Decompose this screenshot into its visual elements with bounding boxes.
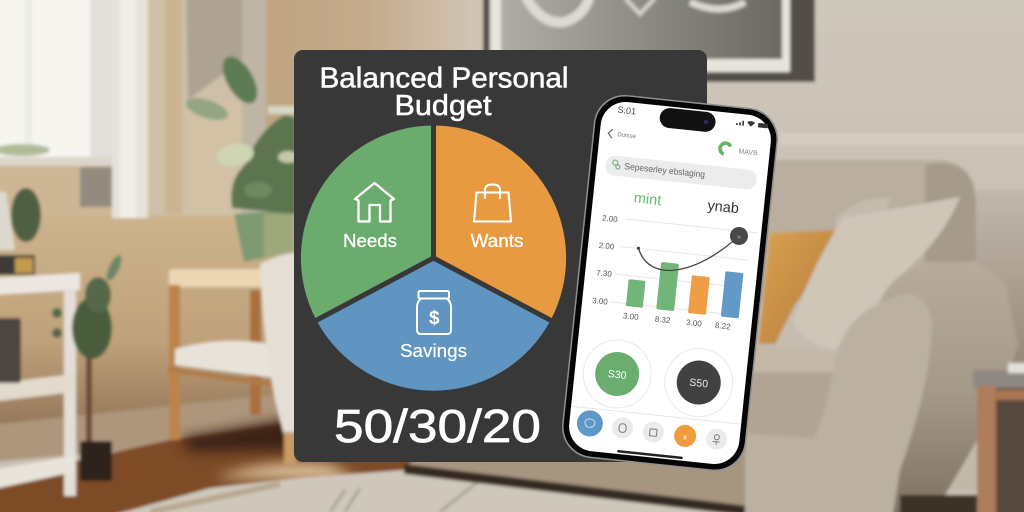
bar chart: 8.32: [654, 315, 671, 325]
phone mockup: [559, 92, 781, 474]
icon: savings jar: [417, 291, 451, 334]
baseboard: [0, 392, 300, 462]
icon: house: [355, 183, 394, 222]
plant: large leaves and pot: [183, 51, 298, 262]
icon: shopping bag: [474, 184, 511, 222]
bar chart: 3.00: [592, 296, 609, 307]
icon: savings jar: $: [429, 308, 440, 329]
small potted tree: [52, 253, 124, 481]
panel: 50/30/20 budget card: [294, 50, 707, 462]
white shelf: [0, 188, 80, 496]
sofa: [745, 160, 976, 512]
label: ynab: ynab: [707, 198, 740, 217]
app header: [607, 129, 759, 157]
title: Balanced Personal: [320, 62, 568, 94]
ratio text: 50/30/20: [334, 400, 541, 452]
beige cushion: [793, 197, 960, 350]
bar chart: 8.22: [715, 321, 732, 332]
curtains: [112, 0, 266, 218]
title: [320, 62, 568, 122]
bar chart: 3.00: [623, 311, 640, 322]
balance dial: dark: S50: [689, 377, 709, 391]
orange cushion: [758, 230, 835, 344]
bar chart: [591, 212, 758, 333]
search bar: Sepeserley ebslaging: [624, 161, 706, 180]
bar chart: 7.30: [596, 268, 613, 279]
wall moulding: [780, 133, 1024, 145]
bottom navigation: x: [683, 432, 687, 442]
picture frame: [483, 0, 815, 82]
rug: [95, 470, 790, 512]
bar chart: 3.00: [686, 318, 703, 329]
balance dial: green: S30: [607, 368, 627, 382]
window: [0, 0, 112, 216]
bottom navigation: [567, 406, 741, 465]
sofa base behind panel: [404, 430, 850, 512]
balance dial: dark: [661, 345, 736, 420]
side table: [973, 363, 1024, 512]
slice: wants: [434, 125, 566, 320]
app header: MAVB: [738, 148, 758, 157]
bar chart: 2.00: [598, 241, 615, 252]
status bar: [616, 103, 769, 138]
slice: needs: [301, 125, 434, 320]
status bar: S:01: [617, 105, 637, 116]
pie chart: [301, 120, 566, 391]
app header: Dutsse: [617, 132, 637, 140]
label: needs: Needs: [343, 230, 397, 251]
title: Budget: [394, 90, 492, 122]
wooden chair: [168, 253, 296, 464]
back cushion: [835, 198, 890, 250]
label: savings: Savings: [400, 341, 467, 361]
label: wants: Wants: [470, 230, 524, 251]
balance dial: green: [580, 337, 655, 411]
bar chart: 2.00: [602, 214, 619, 224]
floor: [0, 420, 420, 512]
slice: savings: [316, 258, 551, 391]
search bar: [604, 155, 758, 190]
trend line: [635, 217, 749, 278]
trend line: »: [737, 234, 741, 241]
label: mint: mint: [633, 190, 662, 209]
sofa arm: [813, 262, 1018, 512]
